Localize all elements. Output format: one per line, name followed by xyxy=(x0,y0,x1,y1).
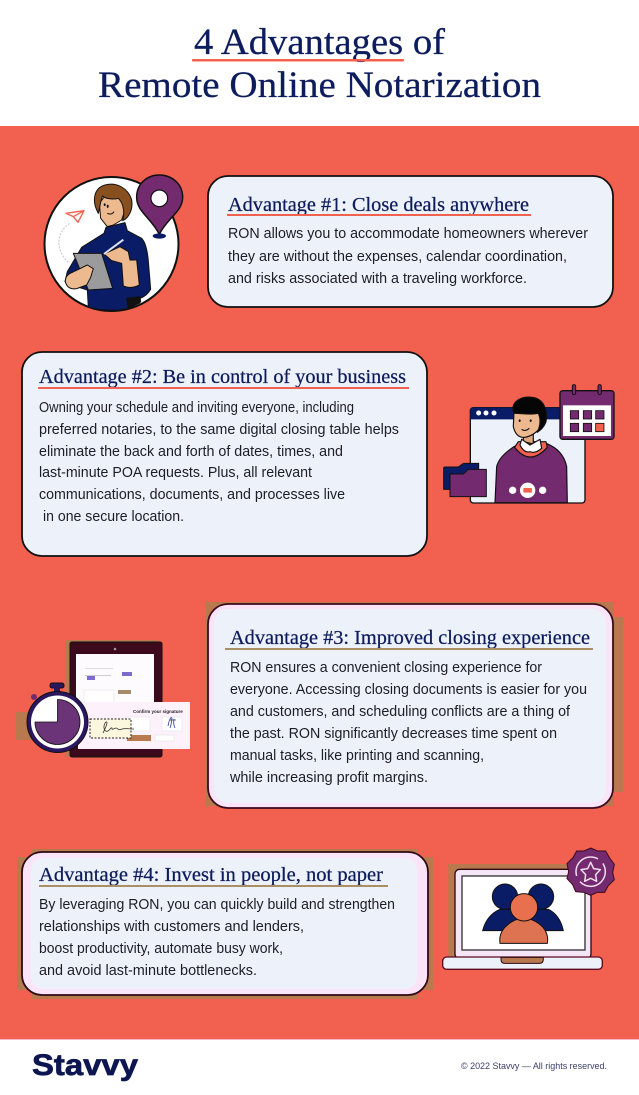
heading: Advantage #1: Close deals anywhere xyxy=(228,194,529,216)
text block: eliminate the back and forth of dates, times, and xyxy=(39,444,343,460)
text block: boost productivity, automate busy work, xyxy=(39,941,283,957)
heading: Advantage #4: Invest in people, not paper xyxy=(39,864,383,886)
icon: stopwatch xyxy=(27,683,88,752)
text block: manual tasks, like printing and scanning, xyxy=(230,748,484,764)
text block: preferred notaries, to the same digital closing table helps xyxy=(39,422,399,438)
text block xyxy=(39,400,399,525)
text block: and avoid last-minute bottlenecks. xyxy=(39,963,257,979)
icon: person xyxy=(65,184,151,310)
icon: folder xyxy=(444,463,486,497)
text block: relationships with customers and lenders, xyxy=(39,919,304,935)
panel: advantage 3 xyxy=(206,602,623,808)
text block: By leveraging RON, you can quickly build and strengthen xyxy=(39,897,395,913)
title xyxy=(98,22,541,106)
icon: people xyxy=(483,884,563,943)
icon: signature dialog: Confirm your signature xyxy=(133,709,183,714)
icon: paper plane with dotted path xyxy=(59,211,84,262)
footer copyright: © 2022 Stavvy — All rights reserved. xyxy=(461,1061,607,1072)
heading: Advantage #2: Be in control of your business xyxy=(39,366,406,388)
footer logo: Stavvy xyxy=(32,1049,138,1082)
text block xyxy=(229,660,587,786)
icon: browser window xyxy=(470,408,585,503)
text block xyxy=(228,226,588,287)
text block: they are without the expenses, calendar coordination, xyxy=(228,249,567,265)
text block: RON ensures a convenient closing experience for xyxy=(230,660,542,676)
text block: last-minute POA requests. Plus, all relevant xyxy=(39,465,312,481)
panel: advantage 1 xyxy=(208,176,613,307)
text block: in one secure location. xyxy=(43,509,184,525)
icon: person on call xyxy=(495,397,567,503)
illustration: tablet, signature and stopwatch xyxy=(16,640,190,757)
illustration: person with tablet and location pin xyxy=(44,175,183,311)
icon: signature dialog xyxy=(78,702,190,749)
text block: the past. RON significantly decreases time spent on xyxy=(230,726,557,742)
panel: advantage 2 xyxy=(22,352,427,556)
text block: RON allows you to accommodate homeowners wherever xyxy=(228,226,588,242)
text block: while increasing profit margins. xyxy=(229,770,428,786)
icon: laptop xyxy=(443,869,602,969)
icon: star badge xyxy=(567,848,614,895)
title: Remote Online Notarization xyxy=(98,65,541,106)
text block: communications, documents, and processes live xyxy=(39,487,345,503)
illustration: laptop with people and badge xyxy=(443,848,614,969)
title: 4 Advantages of xyxy=(194,22,446,63)
illustration: video call with calendar and folder xyxy=(444,385,614,503)
heading: Advantage #3: Improved closing experience xyxy=(230,627,590,649)
text block xyxy=(39,897,395,979)
panel: advantage 4 xyxy=(17,849,433,999)
text block: everyone. Accessing closing documents is easier for you xyxy=(230,682,587,698)
text block: Owning your schedule and inviting everyone, including xyxy=(39,400,354,416)
icon: location pin xyxy=(137,175,183,239)
text block: and risks associated with a traveling workforce. xyxy=(228,271,527,287)
icon: tablet xyxy=(70,642,162,757)
icon: calendar xyxy=(560,385,614,439)
text block: and customers, and scheduling conflicts are a thing of xyxy=(230,704,571,720)
